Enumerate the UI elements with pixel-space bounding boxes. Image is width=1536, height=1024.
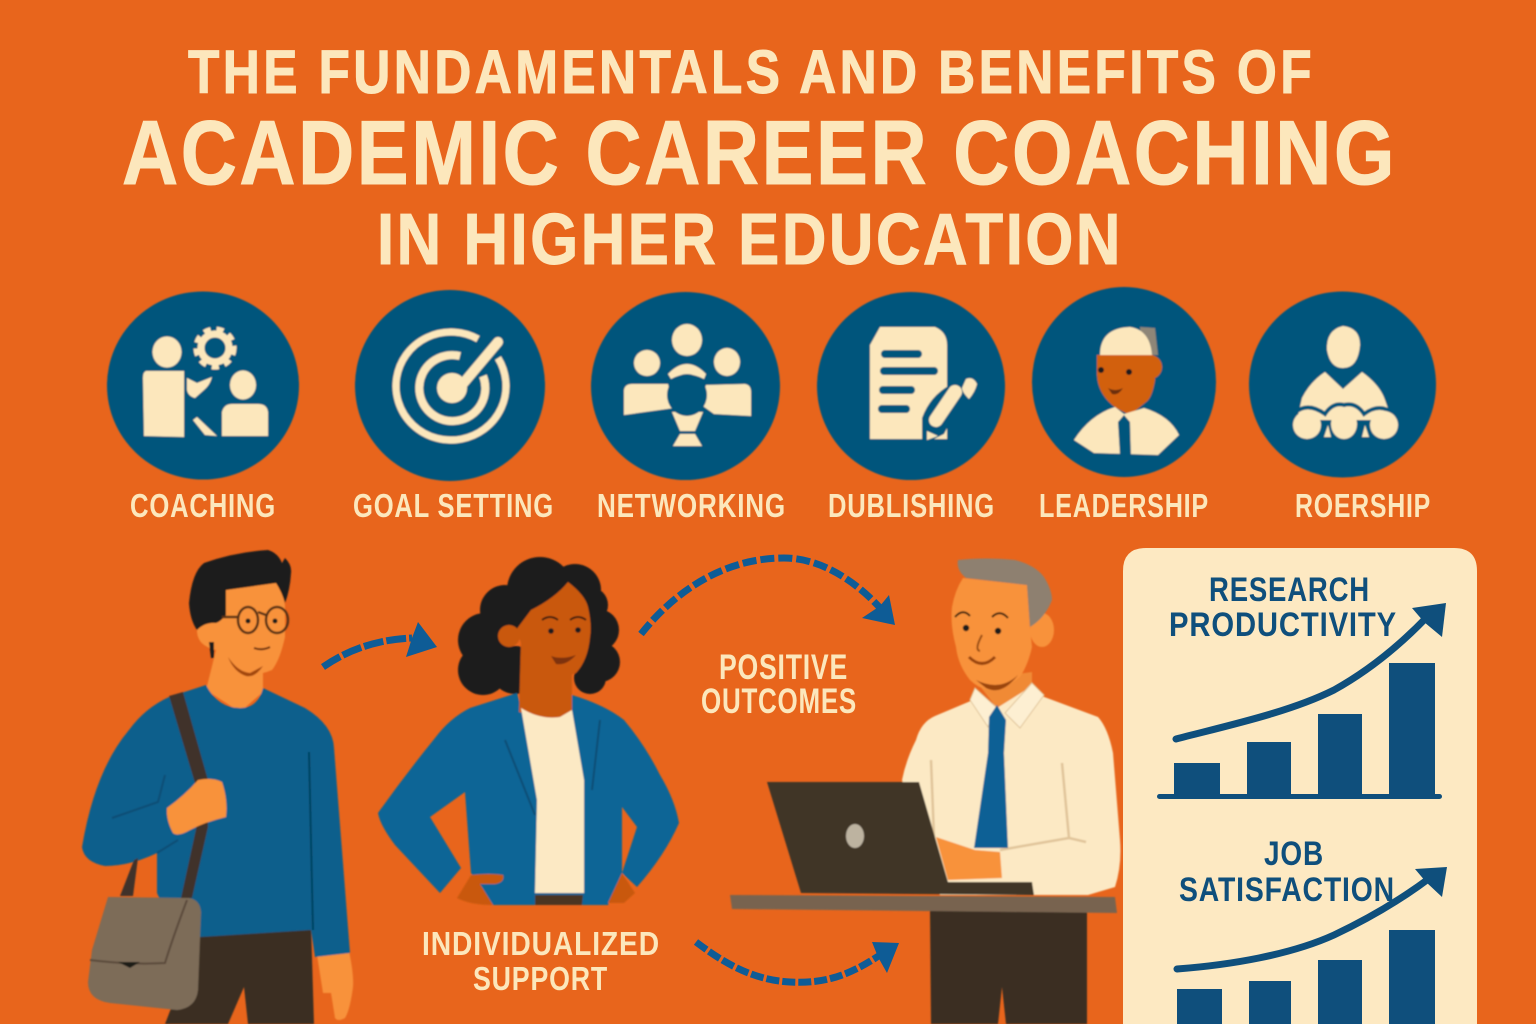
heading: job satisfaction xyxy=(1179,835,1395,909)
label: positive outcomes xyxy=(701,648,857,721)
label: individualized support: INDIVIDUALIZED xyxy=(422,925,660,962)
student figure xyxy=(82,550,353,1024)
professional figure with laptop xyxy=(730,558,1120,1024)
title: IN HIGHER EDUCATION xyxy=(377,200,1123,280)
icon labels: LEADERSHIP xyxy=(1039,487,1209,524)
label: positive outcomes: POSITIVE xyxy=(719,648,848,687)
heading: job satisfaction: SATISFACTION xyxy=(1179,871,1395,909)
label: individualized support xyxy=(422,925,660,997)
icon labels: DUBLISHING xyxy=(828,487,995,524)
heading: research productivity xyxy=(1169,571,1397,644)
heading: research productivity: RESEARCH xyxy=(1209,571,1370,609)
icon labels xyxy=(130,487,1431,524)
icon: leadership person xyxy=(1032,287,1216,477)
icon: networking xyxy=(591,292,780,480)
icon: mentorship group xyxy=(1249,292,1436,478)
arrow: student to coach xyxy=(323,622,437,667)
bar chart: research productivity xyxy=(1157,603,1446,799)
coach figure xyxy=(378,557,679,905)
arrow: coach to outcomes xyxy=(641,558,895,634)
heading: job satisfaction: JOB xyxy=(1264,835,1324,873)
icon labels: ROERSHIP xyxy=(1295,487,1431,524)
label: individualized support: SUPPORT xyxy=(473,960,608,997)
icon: coaching xyxy=(107,292,299,480)
title: THE FUNDAMENTALS AND BENEFITS OF xyxy=(188,38,1315,106)
icon labels: NETWORKING xyxy=(597,487,786,524)
heading: research productivity: PRODUCTIVITY xyxy=(1169,606,1397,644)
arrow: support to outcomes xyxy=(696,942,899,982)
icon: publishing document xyxy=(817,292,1005,480)
panel: outcome charts xyxy=(1123,548,1477,1024)
icon labels: GOAL SETTING xyxy=(353,487,554,524)
icon: goal setting target xyxy=(355,290,545,481)
bar chart: job satisfaction xyxy=(1177,867,1447,1024)
title xyxy=(122,38,1397,280)
icon labels: COACHING xyxy=(130,487,276,524)
label: positive outcomes: OUTCOMES xyxy=(701,682,857,721)
